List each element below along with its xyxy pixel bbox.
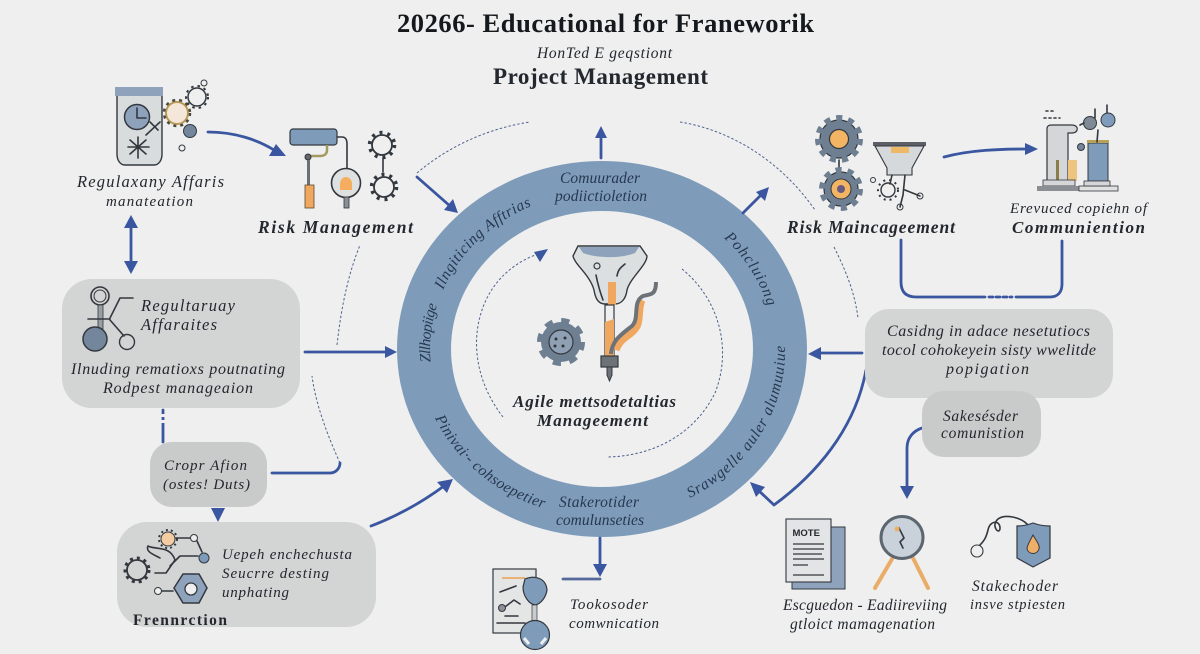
central icon: gear xyxy=(540,321,582,363)
label: escgueden: Escguedon - Eadiireviing xyxy=(782,597,947,614)
panel: stakeholder pill xyxy=(922,391,1041,457)
arrow: icon to communication xyxy=(944,143,1038,157)
arrow: into bottom panel xyxy=(211,508,225,522)
arrow: lower left into ring xyxy=(371,479,453,526)
connector: left panel down xyxy=(162,410,164,442)
icon: magnifier xyxy=(875,516,928,588)
label: escgueden xyxy=(782,597,947,633)
label: tooko communication: Tookosoder xyxy=(570,597,648,613)
label: risk management right: Risk Maincageement xyxy=(786,217,956,237)
icon: network xyxy=(125,530,209,603)
connector: crop panel to dash xyxy=(272,463,340,473)
label: stakeholder xyxy=(970,578,1065,613)
ring label: bottom second line: comulunseties xyxy=(556,512,644,529)
icon: machine xyxy=(1037,105,1118,191)
ring label: lower left: Pinivai·- cohsoepetier xyxy=(434,414,546,507)
panel: crop action: Cropr Afion xyxy=(164,458,247,474)
inner dashed circle arrows xyxy=(477,249,723,457)
arrow: double vertical xyxy=(124,215,138,274)
arrow: icon to risk management xyxy=(208,132,286,156)
dashed orbit lines xyxy=(312,122,858,463)
panel: crop action xyxy=(150,442,267,507)
label: regulatory affairs xyxy=(76,172,224,210)
icon: note document: MOTE xyxy=(792,528,820,539)
panel: casting: tocol cohokeyein sisty wwelitde xyxy=(882,342,1096,359)
arrow: lower right into ring xyxy=(750,370,866,505)
icon: shield xyxy=(971,517,1050,567)
ring label: left: Zllhopiige xyxy=(419,303,438,362)
title: HonTed E geqstiont xyxy=(536,45,673,62)
panel: regulatory affairs: Affaraites xyxy=(140,315,217,334)
icon: jar with gears xyxy=(115,80,208,165)
arrow: into ring from left panel xyxy=(305,346,397,358)
center label xyxy=(512,392,676,430)
ring label: upper right: Pohcluiong xyxy=(724,232,774,305)
central icon: tool xyxy=(573,246,656,381)
panel: crop action: (ostes! Duts) xyxy=(163,477,250,493)
arrow: into ring from right panel xyxy=(808,347,862,360)
panel: casting xyxy=(865,309,1113,398)
center label: Agile mettsodetaltias xyxy=(512,392,676,411)
panel heading: Regultaruay xyxy=(140,296,236,315)
panel heading: Frennrction xyxy=(133,612,227,629)
title: 20266- Educational for Franeworik xyxy=(397,8,814,38)
panel: regulatory affairs xyxy=(62,279,300,408)
title: Project Management xyxy=(493,64,708,89)
panel: regulatory affairs: Rodpest manageaion xyxy=(102,380,253,397)
panel: casting: Casidng in adace nesetutiocs xyxy=(887,323,1090,340)
panel: framework xyxy=(117,522,376,629)
ring label: top: Comuurader xyxy=(560,170,641,187)
panel: casting: popigation xyxy=(945,361,1029,378)
panel: framework: unphating xyxy=(222,585,290,601)
arrow: top xyxy=(595,126,607,158)
label: regulatory affairs: manateation xyxy=(106,194,193,210)
label: communication: Communiention xyxy=(1012,218,1145,237)
label: escgueden: gtloict mamagenation xyxy=(790,616,935,633)
label: communication xyxy=(1009,201,1149,237)
icon: document with tool xyxy=(493,569,550,650)
panel body: Ilnuding rematioxs poutnating xyxy=(70,361,285,378)
panel: framework: Seucrre desting xyxy=(222,566,330,582)
arrow: ring to risk management right xyxy=(743,187,769,213)
icon: clock and connector xyxy=(83,287,134,351)
label: stakeholder: insve stpiesten xyxy=(970,597,1065,613)
label: tooko communication: comwnication xyxy=(569,616,659,632)
arrow: stakeholder pill down xyxy=(900,428,922,499)
icon: gears and funnel xyxy=(818,118,926,210)
panel body: Uepeh enchechusta xyxy=(222,547,352,563)
connector: risk to communication xyxy=(901,240,1062,297)
center label: Manageement xyxy=(536,411,649,430)
panel: stakeholder pill: Sakesésder xyxy=(943,408,1019,425)
ring label: upper left: Ilngiticing Afftrias xyxy=(434,200,530,290)
ring label: top second line: podiictioletion xyxy=(554,188,647,205)
arrow: bottom xyxy=(563,538,607,579)
label: communication: Erevuced copiehn of xyxy=(1009,201,1149,217)
panel: stakeholder pill: comunistion xyxy=(941,425,1024,442)
central ring xyxy=(397,161,807,537)
label: risk management left: Risk Management xyxy=(257,217,414,237)
label: regulatory affairs: Regulaxany Affaris xyxy=(76,172,224,191)
label: stakeholder: Stakechoder xyxy=(972,578,1059,595)
ring label: bottom: Stakerotider xyxy=(559,494,640,511)
icon: note document xyxy=(786,519,845,589)
label: tooko communication xyxy=(569,597,659,632)
title xyxy=(397,8,814,89)
icon: roller and bulb xyxy=(290,129,396,208)
arrow: from risk management left to ring xyxy=(417,177,458,213)
